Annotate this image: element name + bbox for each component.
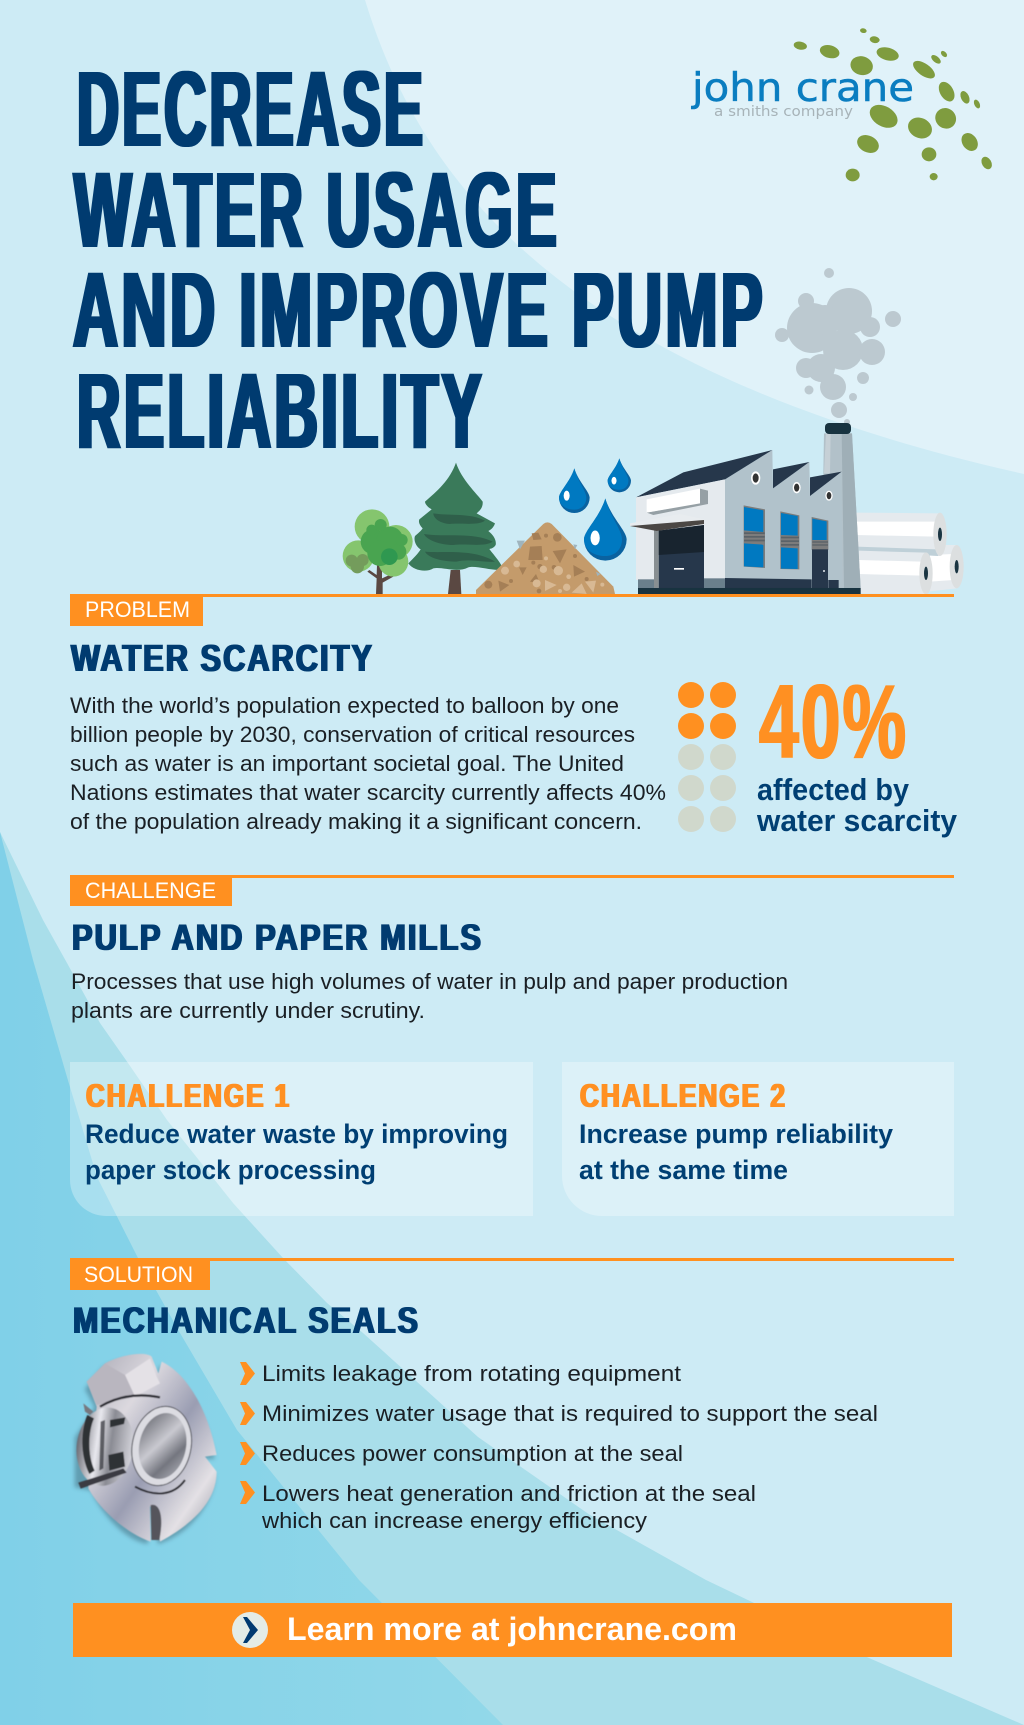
tag: problem	[70, 594, 203, 626]
panel: solution	[70, 1258, 954, 1544]
link text: Learn more at johncrane.com	[287, 1611, 737, 1647]
illustration: smoke	[775, 268, 901, 425]
sand pile	[476, 522, 615, 594]
tag: challenge	[70, 875, 232, 906]
challenge body text	[71, 969, 788, 1023]
problem body text: billion people by 2030, conservation of critical resources	[70, 722, 635, 747]
stat: 40%: 40%	[759, 663, 908, 781]
benefit list	[240, 1361, 878, 1533]
stat caption: affected by	[757, 772, 910, 807]
section rule	[70, 875, 954, 878]
bullet 4: which can increase energy efficiency	[261, 1508, 647, 1533]
problem body text: of the population already making it a significant concern.	[70, 809, 642, 834]
factory building	[630, 450, 861, 594]
stat caption	[756, 772, 958, 838]
card: challenge 1: Reduce water waste by improving	[85, 1119, 508, 1149]
heading: water scarcity: WATER SCARCITY	[71, 638, 374, 680]
card: challenge 1	[70, 1062, 533, 1216]
call to action banner	[73, 1603, 952, 1657]
drop 2	[608, 458, 631, 492]
title: RELIABILITY	[77, 350, 485, 471]
card: challenge 1: paper stock processing	[85, 1155, 376, 1185]
chimney	[823, 423, 861, 588]
mechanical seal image	[71, 1354, 217, 1544]
tag label: PROBLEM	[85, 597, 190, 622]
paper rolls	[856, 513, 964, 594]
card: challenge 2: CHALLENGE 2	[580, 1077, 787, 1114]
card: challenge 2: Increase pump reliability	[579, 1119, 893, 1149]
bullet 2: Minimizes water usage that is required to support the seal	[262, 1401, 878, 1426]
logo wordmark: john crane	[691, 66, 914, 111]
tag label: SOLUTION	[84, 1262, 193, 1287]
bullet 3: Reduces power consumption at the seal	[262, 1441, 683, 1466]
problem body text	[70, 693, 666, 834]
dot pictogram: 40 percent	[678, 682, 736, 832]
illustration: factory and paper rolls	[630, 423, 964, 594]
bullet 1: Limits leakage from rotating equipment	[262, 1361, 681, 1386]
small round tree	[343, 509, 413, 594]
panel: problem	[70, 594, 958, 838]
panel: challenge	[70, 875, 954, 1216]
card: challenge 1: CHALLENGE 1	[86, 1077, 291, 1114]
bullet 4: Lowers heat generation and friction at the seal	[262, 1481, 756, 1506]
pine tree	[408, 463, 503, 594]
problem body text: such as water is an important societal goal. The United	[70, 751, 624, 776]
section rule	[70, 1258, 954, 1261]
illustration: trees, sand pile and water drops	[343, 458, 631, 594]
title	[73, 48, 766, 471]
drop 3	[584, 499, 627, 561]
drop 1	[559, 468, 590, 513]
tag: solution	[70, 1258, 210, 1290]
title: WATER USAGE	[74, 149, 560, 270]
problem body text: With the world’s population expected to balloon by one	[70, 693, 619, 718]
section rule	[70, 594, 954, 597]
water drops	[559, 458, 631, 561]
heading: mechanical seals: MECHANICAL SEALS	[73, 1300, 420, 1341]
stat caption: water scarcity	[756, 803, 958, 838]
icon: arrow circle	[232, 1612, 268, 1648]
tag label: CHALLENGE	[85, 878, 216, 903]
john crane logo	[691, 28, 994, 181]
title: DECREASE	[77, 48, 426, 169]
logo dots	[793, 28, 994, 181]
challenge body text: plants are currently under scrutiny.	[71, 998, 425, 1023]
card: challenge 2: at the same time	[579, 1155, 788, 1185]
problem body text: Nations estimates that water scarcity currently affects 40%	[70, 780, 666, 805]
logo tagline: a smiths company	[714, 104, 853, 120]
card: challenge 2	[562, 1062, 954, 1216]
bullet 4	[240, 1481, 756, 1533]
heading: pulp and paper mills: PULP AND PAPER MILLS	[72, 917, 483, 958]
challenge body text: Processes that use high volumes of water in pulp and paper production	[71, 969, 788, 994]
